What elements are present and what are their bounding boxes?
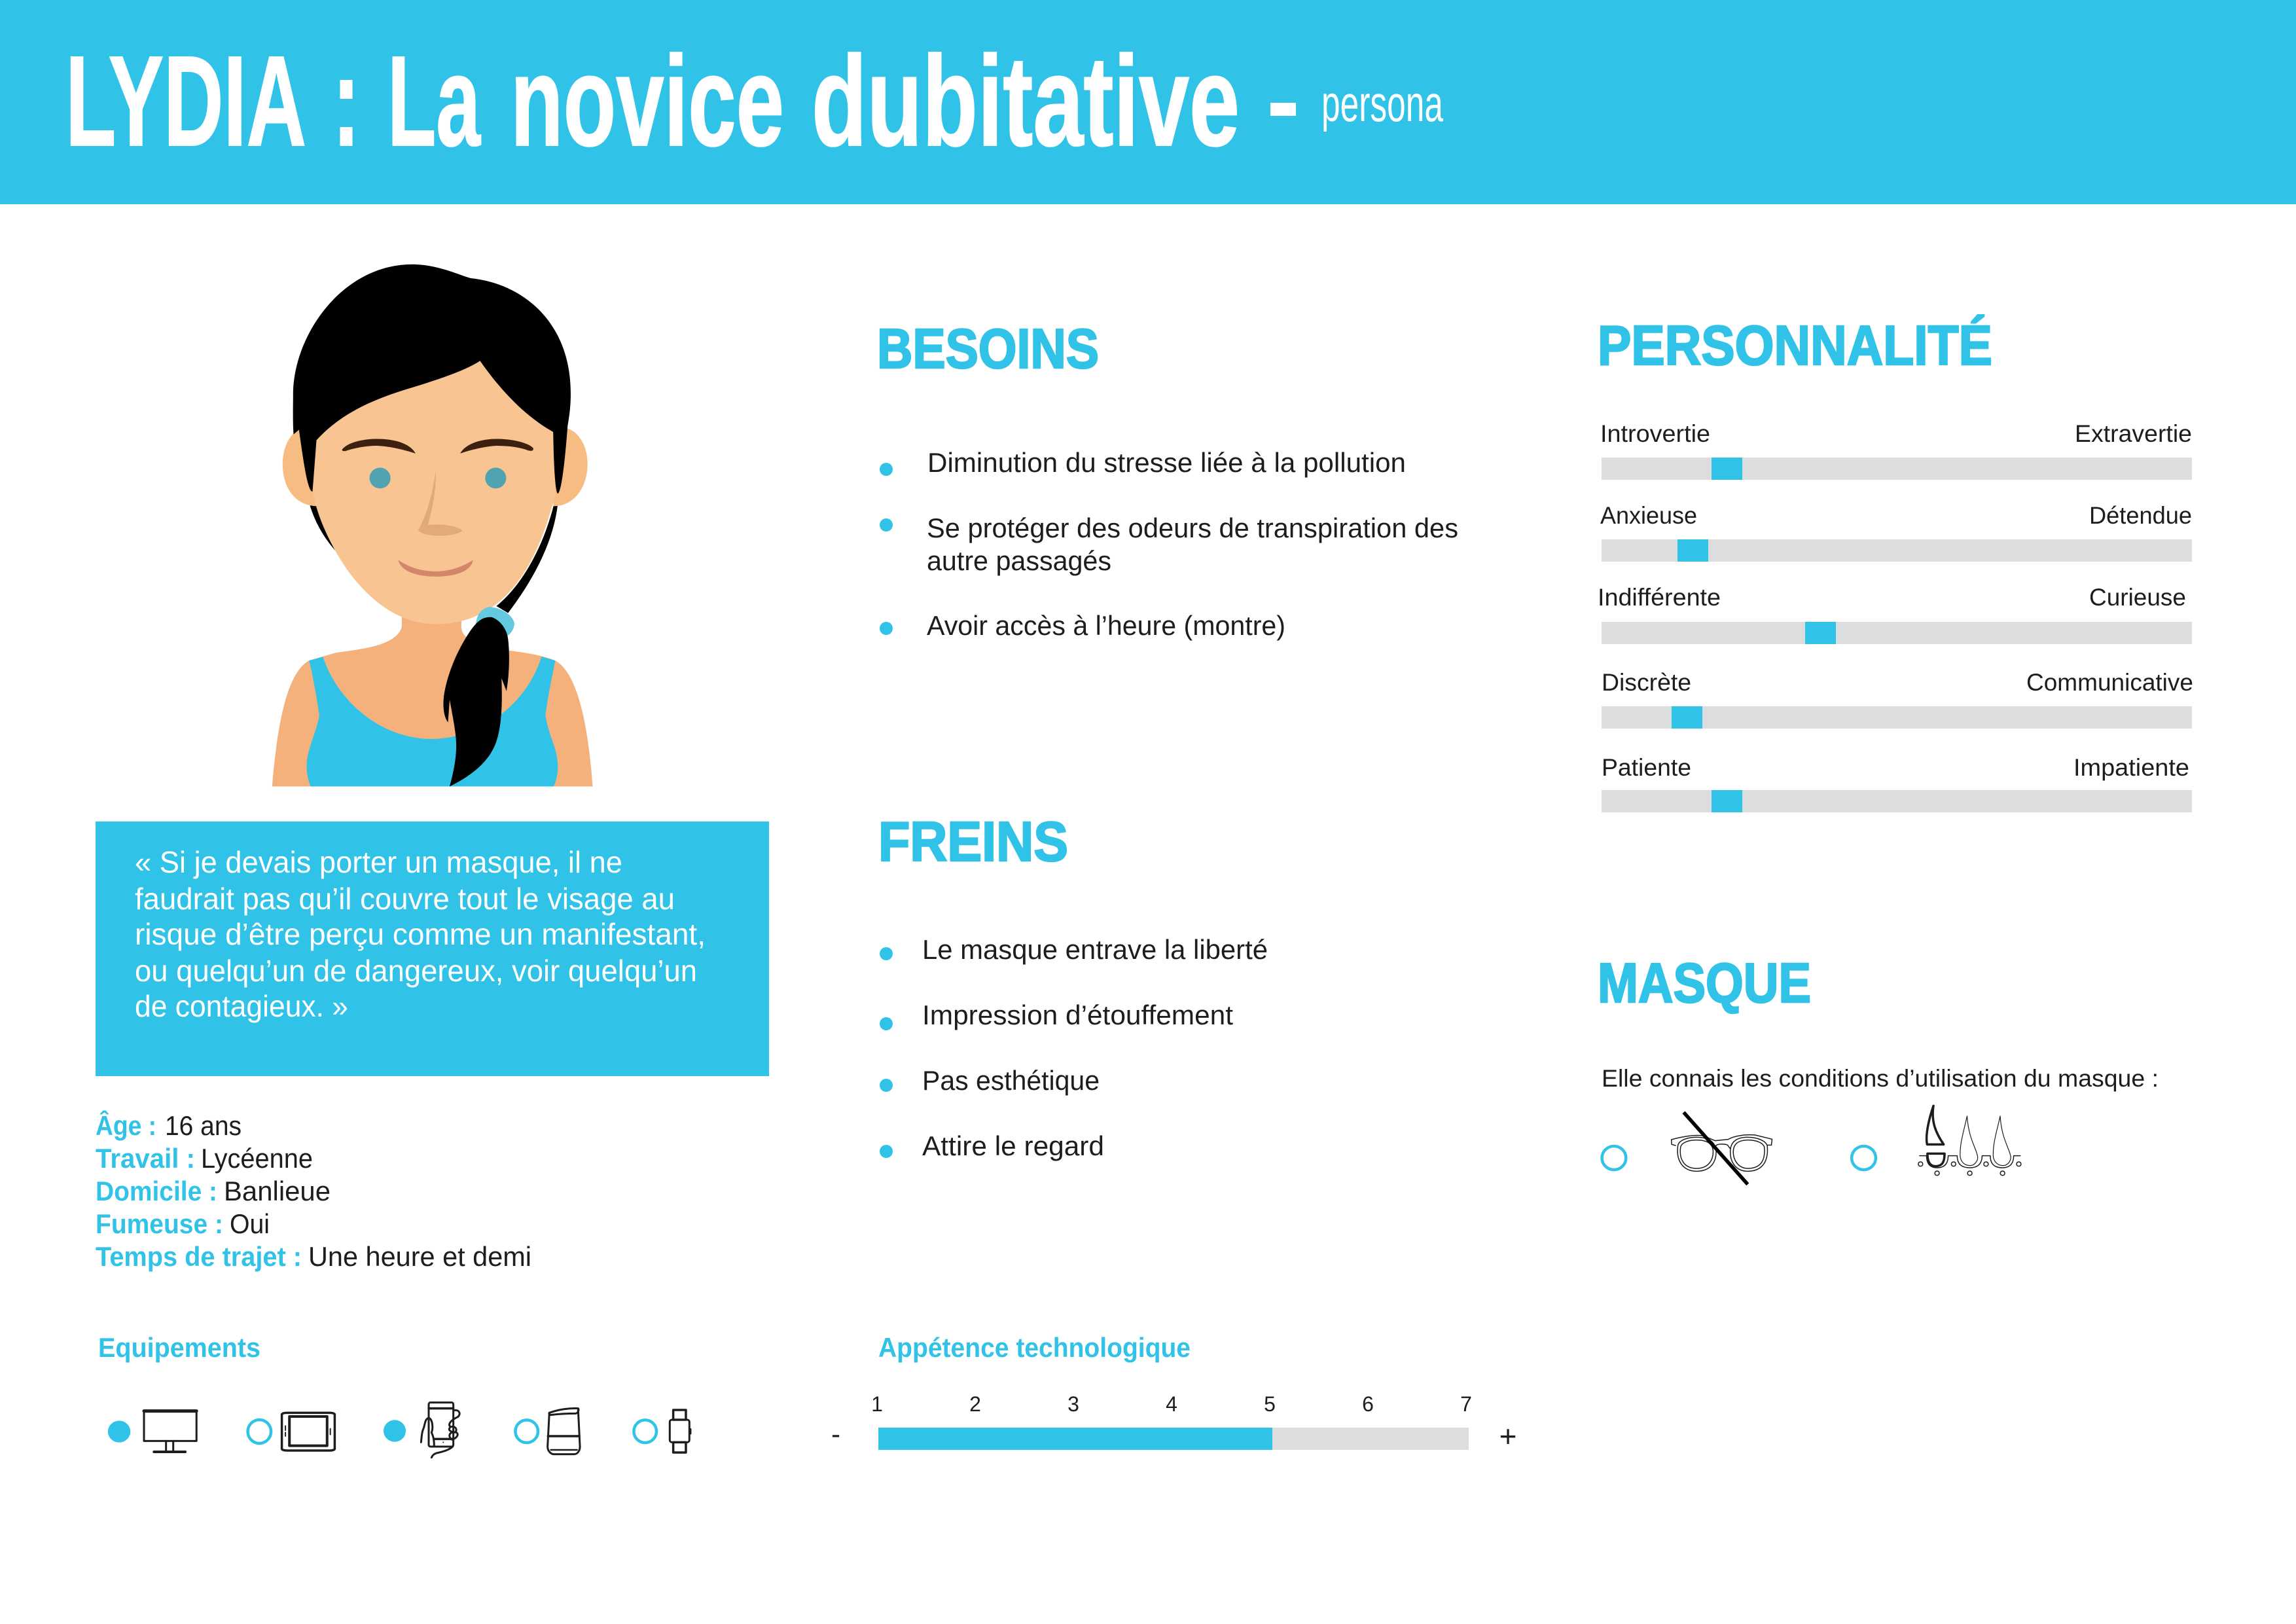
- icons: mask conditions: [1602, 1106, 2021, 1184]
- slider: Indifférente / Curieuse: [1598, 584, 2192, 644]
- illustration: Lydia portrait: [272, 264, 593, 787]
- text block: profile facts: Lycéenne: [201, 1143, 313, 1174]
- icon: crossed-out glasses: [1602, 1112, 1772, 1184]
- slider: Patiente / Impatiente: [1602, 754, 2192, 812]
- slider: Introvertie / Extravertie: [1600, 420, 2192, 480]
- list: barriers: Impression d’étouffement: [922, 1000, 1233, 1030]
- text block: profile facts: Travail :: [96, 1143, 195, 1174]
- slider: Discrète / Communicative: Communicative: [2026, 669, 2193, 696]
- icons: equipment: [108, 1403, 691, 1458]
- list: barriers: Le masque entrave la liberté: [922, 934, 1268, 965]
- title: LYDIA: [65, 29, 306, 173]
- slider: Introvertie / Extravertie: Introvertie: [1600, 420, 1710, 447]
- panel: quote: de contagieux. »: [135, 989, 348, 1023]
- chart: technology appetite scale: +: [1499, 1419, 1516, 1453]
- slider: Discrète / Communicative: [1602, 669, 2193, 729]
- slider: Indifférente / Curieuse: Indifférente: [1598, 584, 1721, 611]
- icon: tablet, not owned: [248, 1413, 334, 1451]
- list: needs: [880, 447, 1458, 641]
- slider: Anxieuse / Détendue: Anxieuse: [1600, 502, 1697, 529]
- heading: Besoins: BESOINS: [877, 318, 1099, 380]
- panel: quote: « Si je devais porter un masque, il ne: [135, 845, 622, 879]
- list: barriers: Pas esthétique: [922, 1065, 1100, 1096]
- panel: quote: ou quelqu’un de dangereux, voir quelqu’un: [135, 954, 697, 988]
- list: needs: Diminution du stresse liée à la pollution: [927, 447, 1406, 478]
- chart: technology appetite scale: 7: [1460, 1392, 1472, 1416]
- title: [65, 29, 1240, 173]
- subtitle: persona: persona: [1321, 75, 1443, 132]
- chart: technology appetite scale: 3: [1067, 1392, 1079, 1416]
- chart: technology appetite scale: 1: [871, 1392, 883, 1416]
- slider: Patiente / Impatiente: Patiente: [1602, 754, 1691, 781]
- list: needs: Avoir accès à l’heure (montre): [927, 610, 1285, 641]
- text block: profile facts: Âge :: [96, 1110, 156, 1141]
- heading: Masque: MASQUE: [1598, 952, 1811, 1015]
- title: dubitative: [812, 29, 1240, 173]
- chart: technology appetite scale: 5: [1264, 1392, 1276, 1416]
- slider: Patiente / Impatiente: Impatiente: [2073, 754, 2189, 781]
- slider: Anxieuse / Détendue: [1600, 502, 2192, 562]
- chart: personality sliders: [1598, 420, 2193, 812]
- text block: profile facts: 16 ans: [165, 1110, 242, 1141]
- slider: Indifférente / Curieuse: Curieuse: [2089, 584, 2186, 611]
- slider: Discrète / Communicative: Discrète: [1602, 669, 1691, 696]
- panel: quote: risque d’être perçu comme un manifestant,: [135, 917, 706, 951]
- icon: desktop monitor, owned: [108, 1411, 196, 1452]
- text block: profile facts: Temps de trajet :: [96, 1241, 302, 1272]
- text block: profile facts: Une heure et demi: [308, 1241, 531, 1272]
- list: barriers: [880, 934, 1268, 1161]
- icon: nose and skin pores: [1852, 1106, 2021, 1176]
- list: needs: Se protéger des odeurs de transpiration des: [927, 513, 1458, 543]
- title: La: [387, 29, 481, 173]
- heading: Appétence technologique: Appétence technologique: [878, 1332, 1191, 1363]
- chart: technology appetite scale: 4: [1166, 1392, 1177, 1416]
- title: :: [332, 29, 360, 173]
- list: needs: autre passagés: [927, 545, 1111, 576]
- slider: Introvertie / Extravertie: Extravertie: [2075, 420, 2192, 447]
- icon: smartwatch, not owned: [634, 1410, 691, 1453]
- text block: mask statement: Elle connais les conditions d’utilisation du masque :: [1602, 1065, 2159, 1092]
- text block: profile facts: Fumeuse :: [96, 1208, 223, 1239]
- chart: technology appetite scale: [831, 1392, 1516, 1453]
- text block: profile facts: [96, 1110, 531, 1272]
- heading: Freins: FREINS: [878, 811, 1068, 873]
- panel: quote: faudrait pas qu’il couvre tout le visage au: [135, 882, 675, 916]
- panel: quote: [96, 821, 769, 1076]
- list: barriers: Attire le regard: [922, 1130, 1104, 1161]
- title: novice: [511, 29, 784, 173]
- header banner: [0, 0, 2296, 204]
- text block: profile facts: Banlieue: [224, 1176, 331, 1206]
- heading: Equipements: Equipements: [98, 1332, 260, 1363]
- chart: technology appetite scale: 6: [1362, 1392, 1374, 1416]
- text block: profile facts: Domicile :: [96, 1176, 217, 1206]
- icon: hand holding smartphone, owned: [384, 1403, 459, 1458]
- chart: technology appetite scale: -: [831, 1418, 840, 1449]
- chart: technology appetite scale: 2: [969, 1392, 981, 1416]
- text block: profile facts: Oui: [230, 1208, 270, 1239]
- icon: smart speaker, not owned: [515, 1408, 580, 1454]
- slider: Anxieuse / Détendue: Détendue: [2089, 502, 2192, 529]
- heading: Personnalité: PERSONNALITÉ: [1598, 315, 1992, 377]
- title dash: [1270, 103, 1296, 116]
